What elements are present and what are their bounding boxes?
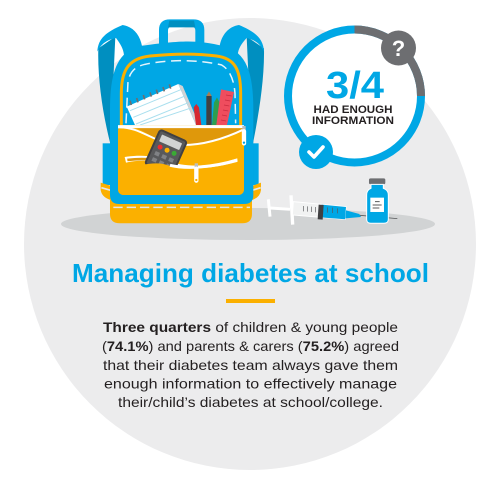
heading: Managing diabetes at school — [72, 258, 429, 288]
body text: enough information to effectively manage — [104, 376, 397, 392]
statistic caption: HAD ENOUGH — [314, 104, 392, 116]
body text — [102, 319, 399, 410]
ground shadow — [61, 208, 435, 240]
statistic caption — [312, 104, 394, 127]
zip pull top — [242, 126, 246, 144]
front pocket — [118, 125, 244, 195]
ring chart: 3/4 — [288, 30, 421, 169]
notepad — [127, 84, 199, 125]
statistic caption: INFORMATION — [312, 115, 394, 127]
body text: their/child’s diabetes at school/college. — [118, 394, 383, 410]
handle — [159, 19, 204, 47]
icon: backpack — [97, 19, 264, 223]
body text: (74.1%) and parents & carers ( 75.2%) agreed — [102, 338, 399, 354]
icon: check mark — [299, 135, 333, 169]
icon: syringe — [268, 195, 397, 225]
icon: question mark: ? — [392, 36, 405, 61]
body text: that their diabetes team always gave them — [103, 357, 398, 373]
zip trim — [121, 54, 241, 127]
pencils and ruler — [194, 89, 234, 125]
back straps — [97, 25, 264, 145]
side pockets — [101, 143, 261, 201]
lower pocket zip — [125, 156, 237, 168]
pocket cover below calculator — [118, 160, 244, 195]
heading underline — [226, 299, 275, 303]
statistic: 3/4 — [326, 65, 384, 107]
bag body — [110, 41, 253, 204]
stitching — [126, 61, 236, 123]
body text: Three quarters of children & young people — [103, 319, 398, 335]
icon: vial — [367, 178, 388, 223]
calculator — [145, 130, 187, 176]
bag base — [110, 200, 252, 223]
zip pull lower — [195, 163, 198, 181]
